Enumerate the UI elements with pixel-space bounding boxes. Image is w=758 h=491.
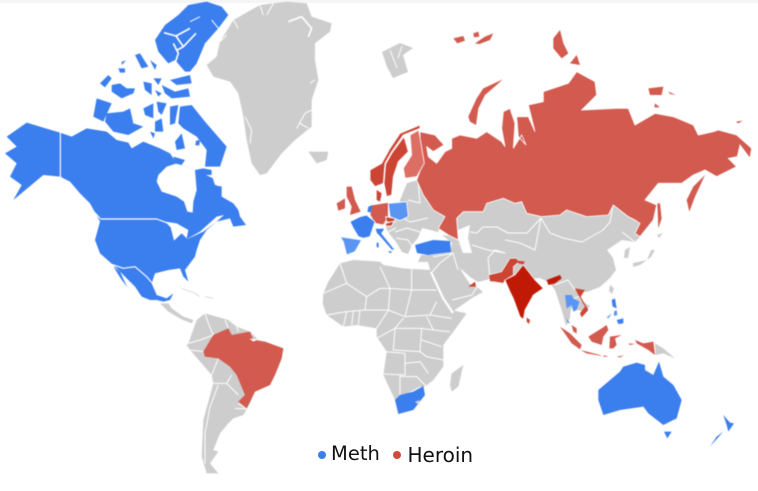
- region: Scandinavia: [370, 125, 424, 202]
- legend: Heroin label: Heroin: [408, 443, 473, 467]
- Asia borders: [388, 180, 635, 300]
- region: Russia: [337, 30, 752, 255]
- Arctic Archipelago: [93, 2, 228, 175]
- region: Africa: [323, 260, 467, 414]
- region: Southeast Asia: [560, 288, 675, 358]
- legend: [318, 442, 473, 467]
- region: Turkey: [415, 240, 451, 255]
- Svalbard: [382, 43, 413, 78]
- region: South Asia: [468, 258, 562, 324]
- region: Greenland: [207, 2, 332, 175]
- Country borders: [60, 133, 167, 283]
- region: North America: [5, 2, 246, 302]
- region: British Isles: [337, 187, 361, 215]
- legend: Heroin marker: [393, 451, 401, 459]
- Hudson Bay: [157, 163, 197, 213]
- Japan: [633, 250, 655, 267]
- Papua New Guinea: [655, 343, 675, 358]
- region: Europe and Asia background: [320, 43, 663, 326]
- region: Western Europe blue: [340, 202, 408, 255]
- region: Germany and Central Europe: [370, 202, 395, 226]
- Brazil: [203, 328, 283, 408]
- legend: Meth marker: [318, 451, 326, 459]
- region: Australia and New Zealand: [598, 362, 734, 447]
- region: Central and South America: [160, 288, 283, 473]
- legend: Meth label: Meth: [331, 442, 380, 465]
- South Africa: [395, 386, 425, 414]
- Philippines: [612, 298, 617, 308]
